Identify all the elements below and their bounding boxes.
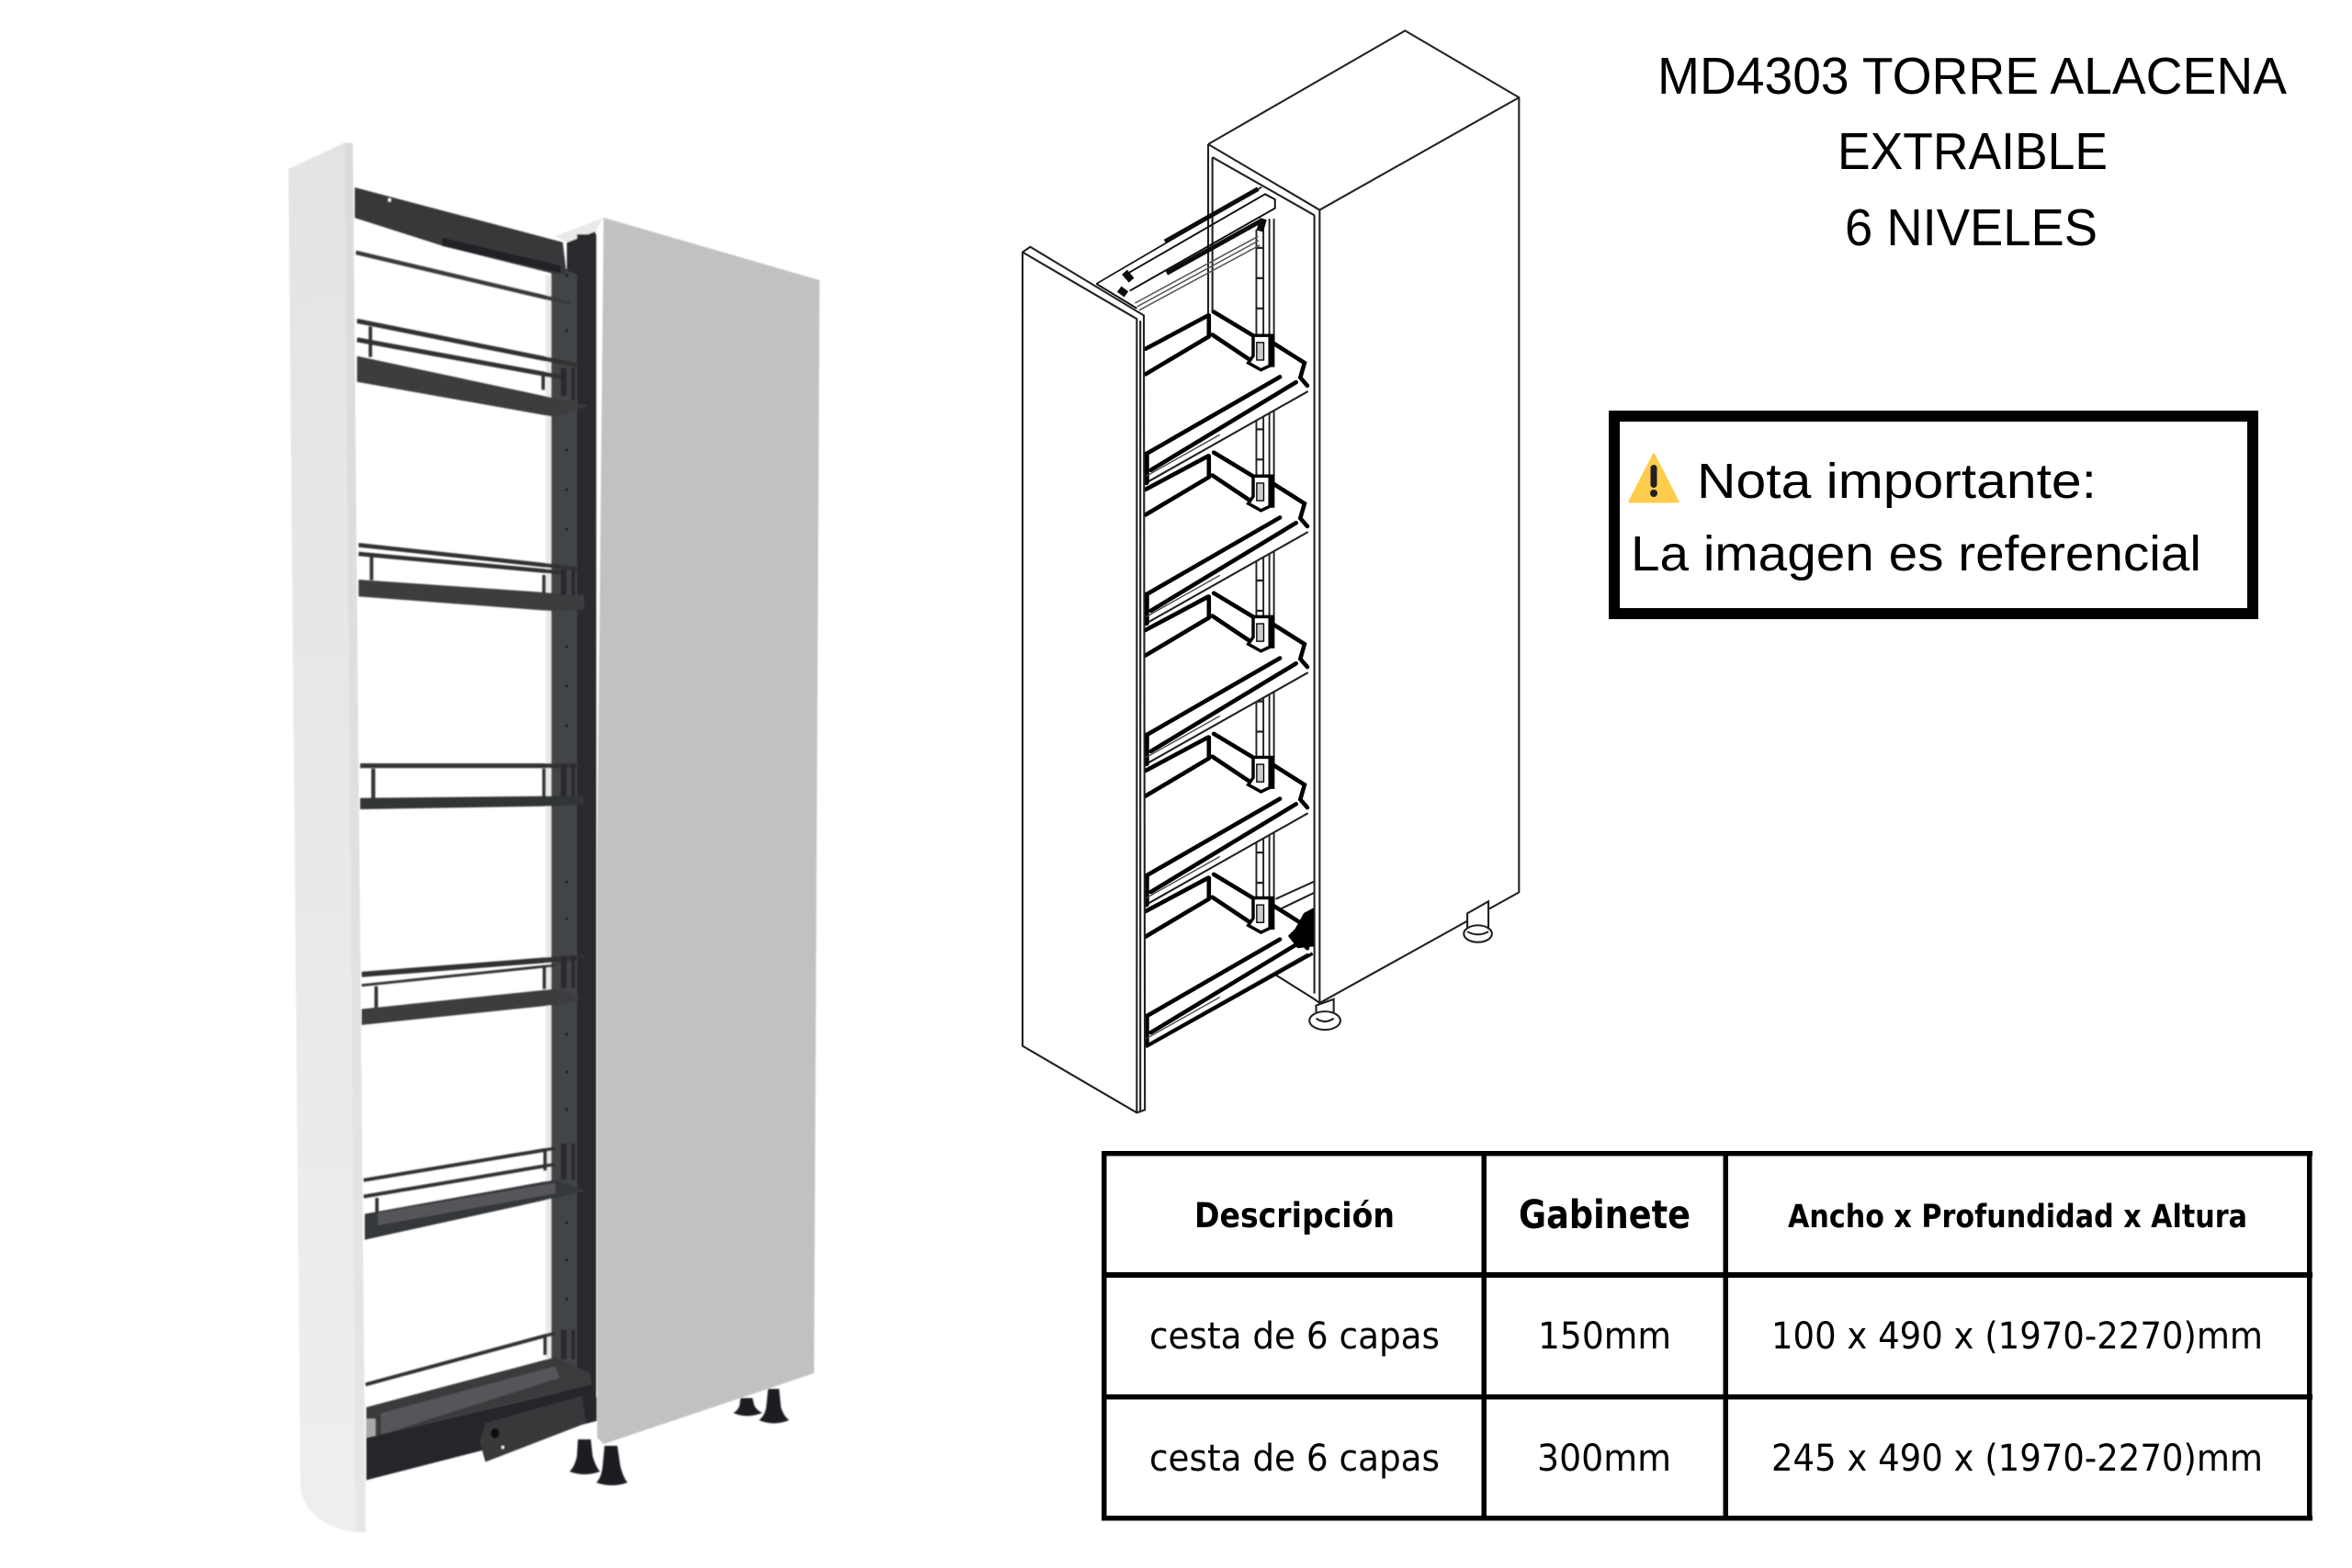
leveling foot right [1464,901,1492,942]
table row 150mm [1149,1315,2263,1358]
note text: Nota importante: [1697,454,2097,509]
note text [1631,454,2201,581]
top slide rails [1096,187,1275,310]
table row 150mm: cesta de 6 capas [1149,1315,1440,1358]
basket level 5 [364,1144,586,1240]
slotted rear post [1256,219,1274,932]
door panel [288,143,366,1532]
table header row: Descripción [1194,1196,1395,1235]
leveling legs [570,1389,789,1485]
table header row [1194,1192,2247,1238]
title: 6 NIVELES [1845,198,2098,257]
shelf level 4 [1146,734,1307,905]
cabinet top lip [555,218,604,243]
basket level 2 [358,545,584,612]
basket level 1 [357,321,588,417]
top slide rail [355,187,567,274]
note text: La imagen es referencial [1631,526,2201,581]
basket level 3 [360,761,584,809]
table header row: Ancho x Profundidad x Altura [1788,1199,2247,1235]
bottom slide blob [1147,908,1314,1046]
specifications table [1102,1151,2312,1521]
title: EXTRAIBLE [1838,122,2108,181]
upper baskets and top rail [355,187,588,809]
lower baskets and slide [362,956,597,1480]
shelf level 5 [1146,874,1307,1045]
cabinet outline [1208,30,1519,1003]
cabinet side panel [597,218,820,1444]
bottom slide detail [1276,882,1315,911]
line drawing: tower with extended shelves [1023,30,1519,1112]
shelf level 2 [1146,453,1307,624]
title [1657,47,2287,257]
table row 300mm [1149,1438,2263,1480]
basket level 6 with slide [366,1330,597,1480]
photo: pull-out pantry tower [288,143,820,1532]
thin upper rail [356,253,570,303]
table row 300mm: 300mm [1537,1438,1671,1480]
table row 300mm: cesta de 6 capas [1149,1438,1440,1480]
basket level 4 [362,956,584,1025]
callout: nota importante [1614,416,2253,614]
table header row: Gabinete [1519,1192,1690,1238]
leveling foot left [1309,999,1340,1030]
shelf level 1 [1146,312,1307,483]
table row 150mm: 100 x 490 x (1970-2270)mm [1771,1315,2263,1358]
title: MD4303 TORRE ALACENA [1657,47,2287,106]
table row 300mm: 245 x 490 x (1970-2270)mm [1771,1438,2263,1480]
table row 150mm: 150mm [1538,1315,1671,1358]
door panel outline [1023,247,1145,1112]
icon: warning triangle [1630,455,1678,502]
dark rear column [546,231,596,1396]
table grid [1102,1151,2312,1521]
shelf level 3 [1146,593,1307,764]
